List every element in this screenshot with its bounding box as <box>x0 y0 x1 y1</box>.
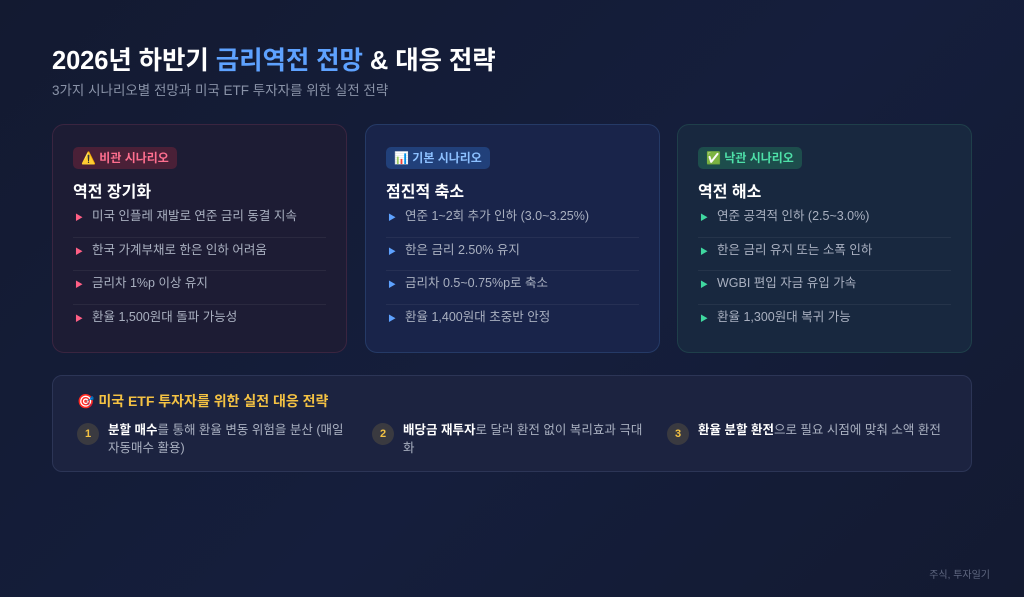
list: optimistic: ▶ 환율 1,300원대 복귀 가능 <box>700 310 851 324</box>
panel: optimistic <box>677 124 972 353</box>
step 2: 2 <box>380 428 386 440</box>
list: pessimistic: ▶ 미국 인플레 재발로 연준 금리 동결 지속 <box>75 209 297 223</box>
step 2: 배당금 재투자로 달러 환전 없이 복리효과 극대 <box>403 423 642 437</box>
step 2: 화 <box>403 441 415 455</box>
list: pessimistic <box>73 209 326 324</box>
heading: optimistic: 역전 해소 <box>698 184 761 201</box>
list: base: ▶ 한은 금리 2.50% 유지 <box>388 242 520 256</box>
heading: pessimistic: 역전 장기화 <box>73 184 151 201</box>
footer credit: 주식, 투자일기 <box>929 570 990 581</box>
step 1 <box>77 423 344 455</box>
panel: base <box>365 124 660 353</box>
step 2 <box>372 423 642 455</box>
badge: base <box>386 147 490 169</box>
list: pessimistic: ▶ 한국 가계부채로 한은 인하 어려움 <box>75 242 267 256</box>
heading: base: 점진적 축소 <box>386 184 464 201</box>
list: base <box>386 209 639 324</box>
list: base: ▶ 금리차 0.5~0.75%p로 축소 <box>388 276 548 290</box>
list: optimistic: ▶ 연준 공격적 인하 (2.5~3.0%) <box>700 209 869 223</box>
list: pessimistic: ▶ 금리차 1%p 이상 유지 <box>75 276 208 290</box>
list: pessimistic: ▶ 환율 1,500원대 돌파 가능성 <box>75 310 237 324</box>
badge: optimistic: ✅ 낙관 시나리오 <box>706 151 794 165</box>
badge: base: 📊 기본 시나리오 <box>394 151 482 165</box>
list: optimistic: ▶ 한은 금리 유지 또는 소폭 인하 <box>700 242 872 256</box>
panel: pessimistic <box>52 124 347 353</box>
list: optimistic: ▶ WGBI 편입 자금 유입 가속 <box>700 276 856 290</box>
step 3 <box>667 423 941 445</box>
list: optimistic <box>698 209 951 324</box>
step 1: 자동매수 활용) <box>108 441 185 455</box>
list: base: ▶ 연준 1~2회 추가 인하 (3.0~3.25%) <box>388 209 589 223</box>
strategy heading: 🎯 미국 ETF 투자자를 위한 실전 대응 전략 <box>77 393 328 409</box>
step 3: 환율 분할 환전으로 필요 시점에 맞춰 소액 환전 <box>698 423 941 437</box>
badge: pessimistic: ⚠️ 비관 시나리오 <box>81 151 169 165</box>
list: base: ▶ 환율 1,400원대 초중반 안정 <box>388 310 550 324</box>
step 1: 1 <box>85 428 91 440</box>
step 1: 분할 매수를 통해 환율 변동 위험을 분산 (매일 <box>108 423 344 437</box>
step 3: 3 <box>675 428 681 440</box>
subtitle: 3가지 시나리오별 전망과 미국 ETF 투자자를 위한 실전 전략 <box>52 83 388 98</box>
panel: strategy <box>52 375 972 472</box>
badge: pessimistic <box>73 147 177 169</box>
title: 2026년 하반기 금리역전 전망 & 대응 전략 <box>52 47 496 75</box>
badge: optimistic <box>698 147 802 169</box>
